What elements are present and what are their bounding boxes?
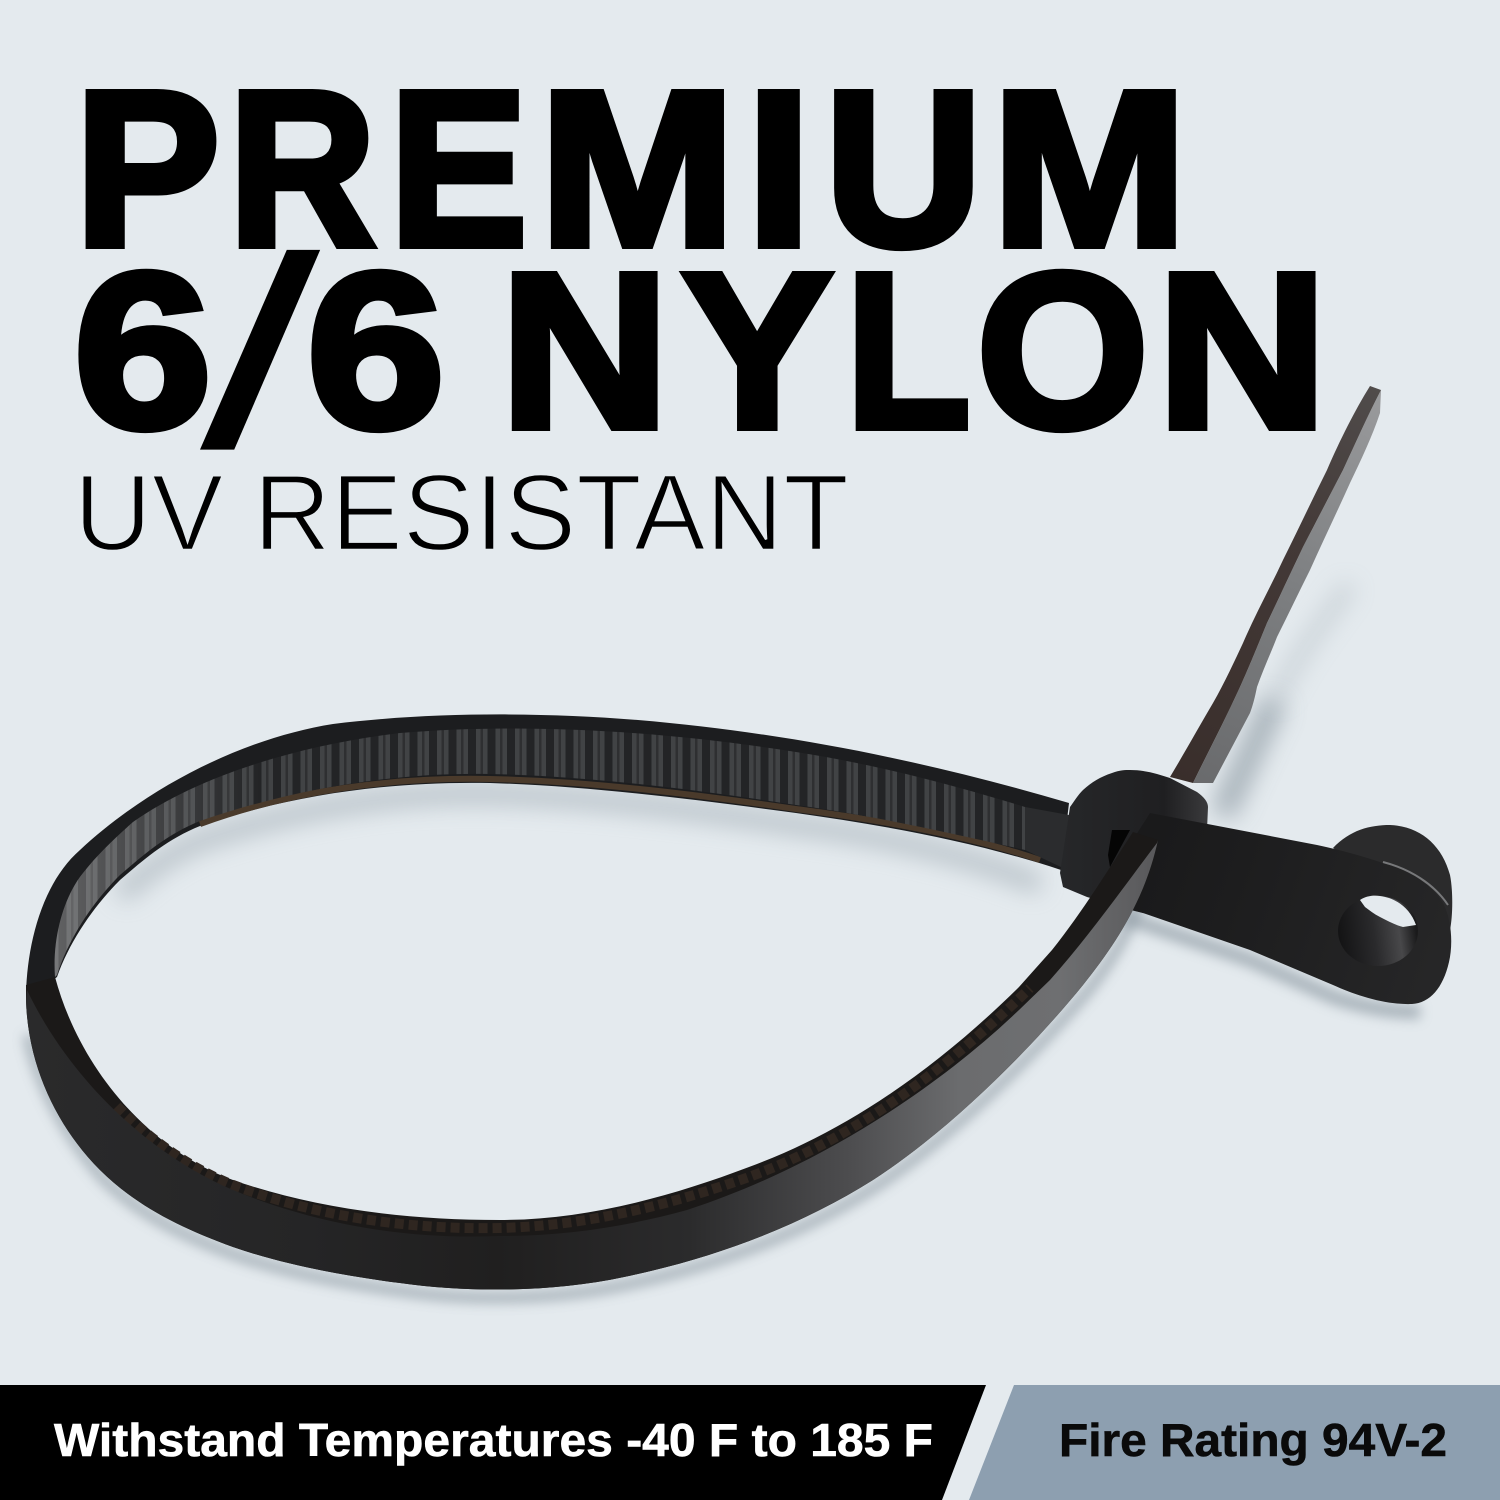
line two: 6/6 NYLON: /	[200, 201, 322, 505]
line two: 6/6 NYLON: 6	[307, 227, 445, 474]
bottom banner: temperature range	[0, 1385, 986, 1500]
eyelet rim highlight	[1383, 862, 1448, 905]
ratchet teeth	[40, 720, 1030, 990]
line two: 6/6 NYLON: L	[846, 228, 971, 475]
upper strap: outer rim and teeth	[26, 714, 1069, 1000]
brown serrated inner edge	[117, 988, 1030, 1228]
see-through opening	[1360, 896, 1416, 927]
line one: PREMIUM: U	[825, 46, 982, 292]
cable tie product illustration	[26, 386, 1452, 1298]
brown inner edge of the teeth	[200, 779, 1040, 860]
line one: PREMIUM: R	[229, 46, 376, 293]
back ring of the mounting eyelet	[1333, 825, 1452, 930]
line one: PREMIUM: M	[539, 46, 735, 292]
soft shadows under the tie	[28, 585, 1420, 1298]
line one: PREMIUM: M	[992, 46, 1187, 293]
tie head block	[1060, 770, 1208, 915]
bottom banner: fire rating	[969, 1385, 1500, 1500]
line one: PREMIUM: I	[746, 46, 811, 293]
lit outer face of the band	[26, 840, 1158, 1290]
eyelet hole	[1338, 896, 1418, 966]
line two: 6/6 NYLON: Y	[682, 228, 832, 475]
line two: 6/6 NYLON: 6	[74, 227, 212, 474]
subtitle: UV resistant: UV RESISTANT	[74, 452, 849, 574]
line one: PREMIUM: E	[390, 46, 527, 293]
title: premium 6/6 nylon	[74, 46, 1327, 505]
bottom banner: temperature range: Withstand Temperatures -40 F to 185 F	[54, 1414, 933, 1466]
line one: PREMIUM: P	[75, 46, 220, 292]
smooth neck next to the head	[1025, 807, 1069, 868]
lower strap: front face of the loop entering the head	[26, 832, 1158, 1290]
mounting arm and eyelet face	[1110, 813, 1451, 1004]
line two: 6/6 NYLON: N	[500, 228, 669, 475]
line two: 6/6 NYLON	[74, 201, 1327, 505]
strap slot in the head	[1108, 830, 1130, 867]
line two: 6/6 NYLON: N	[1157, 227, 1327, 474]
bottom banner: fire rating: Fire Rating 94V-2	[1059, 1414, 1447, 1466]
strap tail rising from the head	[1170, 386, 1381, 783]
line two: 6/6 NYLON: O	[977, 227, 1149, 474]
line one: PREMIUM	[75, 46, 1187, 293]
